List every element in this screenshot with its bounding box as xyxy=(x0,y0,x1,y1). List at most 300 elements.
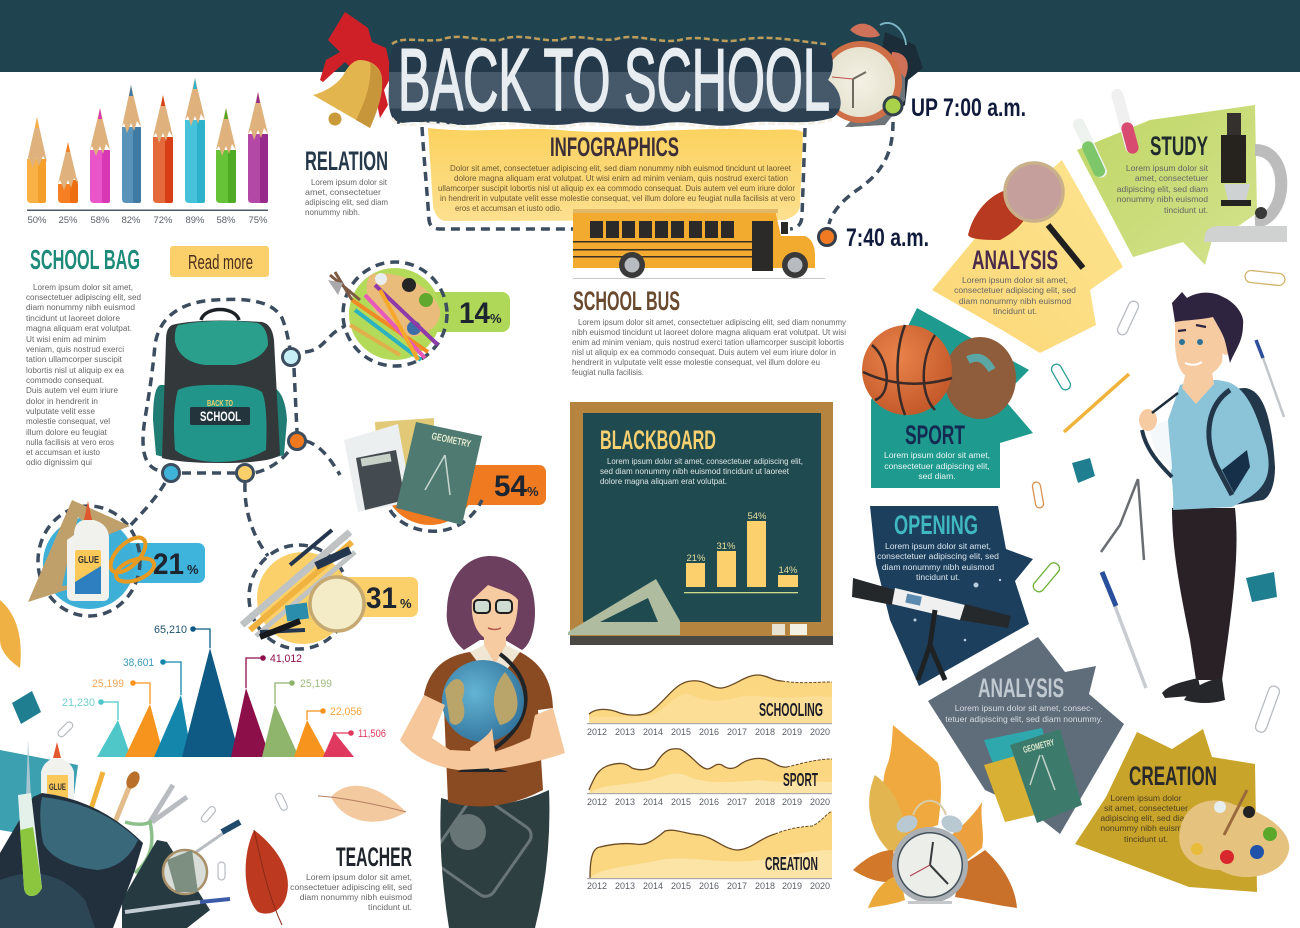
study shape xyxy=(1077,105,1257,265)
clock bells xyxy=(894,812,965,836)
pencil 58% xyxy=(90,108,110,203)
analysis text xyxy=(945,703,1103,724)
sport years: 2015 xyxy=(671,797,691,807)
school bag text xyxy=(26,282,141,467)
creation label: CREATION xyxy=(765,854,818,874)
skirt xyxy=(440,790,549,928)
value labels: 65,210 xyxy=(154,624,187,636)
yellow bottom leaf xyxy=(868,875,905,908)
scissors xyxy=(105,532,157,586)
value labels: 22,056 xyxy=(330,706,362,718)
palette xyxy=(367,273,440,337)
schooling years: 2014 xyxy=(643,727,663,737)
blue pen xyxy=(125,902,200,912)
pencil percent labels: 25% xyxy=(58,215,78,226)
sport text xyxy=(884,450,990,481)
creation years: 2018 xyxy=(755,881,775,891)
eyes xyxy=(1179,339,1203,345)
raised arm xyxy=(1148,420,1172,470)
paint palette xyxy=(1179,790,1289,877)
bag flap xyxy=(175,321,268,365)
share: 31% drawing tools xyxy=(242,530,418,649)
sharpener: left xyxy=(12,691,41,724)
school bag text: magna aliquam erat volutpat. xyxy=(26,323,132,333)
backpack pocket xyxy=(0,873,95,928)
sharpeners xyxy=(1072,458,1277,602)
read more button: Read more xyxy=(188,252,253,274)
plaque top stitching xyxy=(392,37,826,44)
percent value: 14 xyxy=(459,297,490,330)
study text: Lorem ipsum dolor sit xyxy=(1126,163,1209,173)
read more button xyxy=(170,246,269,277)
shoes xyxy=(1162,678,1225,703)
creation years: 2019 xyxy=(782,881,802,891)
teacher text: consectetuer adipiscing elit, sed xyxy=(290,882,412,892)
area chart: creation xyxy=(587,811,832,891)
creation text xyxy=(1100,793,1192,844)
value labels xyxy=(62,624,386,740)
analysis text xyxy=(954,275,1076,316)
creation years: 2015 xyxy=(671,881,691,891)
right leaf xyxy=(945,802,983,870)
sport years: 2012 xyxy=(587,797,607,807)
school bus text: enim ad minim veniam, quis nostrud exerci tation ullamcorper suscipit lobortis xyxy=(572,337,844,347)
analysis heading: ANALYSIS xyxy=(972,245,1058,275)
chalk tray items xyxy=(772,624,785,635)
blackboard text: Lorem ipsum dolor sit amet, consectetuer adipiscing elit, xyxy=(607,456,803,466)
sport text: sed diam. xyxy=(918,471,956,481)
neck xyxy=(484,636,506,664)
lower right leaf xyxy=(955,850,1017,908)
infographics body: dolore magna aliquam erat volutpat. Ut wisi enim ad minim veniam, quis nostrud exerci tation xyxy=(454,173,788,183)
clock stand xyxy=(908,901,952,904)
magnifier xyxy=(310,577,364,631)
value labels: 41,012 xyxy=(270,653,302,665)
timeline node: bus xyxy=(818,228,836,246)
creation years: 2017 xyxy=(727,881,747,891)
blackboard text xyxy=(600,456,803,486)
school bag text: diam nonummy nibh euismod xyxy=(26,302,135,312)
face xyxy=(1175,312,1224,378)
trousers xyxy=(1172,508,1237,680)
teal notebook xyxy=(984,728,1056,795)
schooling years xyxy=(587,727,830,737)
analysis text: Lorem ipsum dolor sit amet, xyxy=(962,275,1068,285)
bar labels: 54% xyxy=(747,511,767,522)
school bag text: consectetuer adipiscing elit, sed xyxy=(26,292,141,302)
teacher figure xyxy=(400,556,565,928)
orange pill xyxy=(455,465,546,505)
neck xyxy=(1182,372,1214,404)
school bag text: commodo consequat. xyxy=(26,375,104,385)
creation text: sit amet, consectetuer xyxy=(1104,803,1188,813)
shirt xyxy=(424,652,553,806)
panel: analysis yellow xyxy=(932,160,1123,353)
pale left leaf xyxy=(869,775,908,852)
share: 21% glue and ruler xyxy=(28,500,205,616)
backpack strap xyxy=(1209,390,1232,495)
school bag text: tation ullamcorper suscipit xyxy=(26,354,123,364)
creation text: adipiscing elit, sed diam xyxy=(1100,813,1192,823)
clock wire xyxy=(880,23,906,45)
leaf: pale xyxy=(318,786,406,822)
backpack flap xyxy=(40,797,138,870)
study text xyxy=(1117,163,1209,215)
test tubes xyxy=(1071,88,1140,180)
school bag text: veniam, quis nostrud exerci xyxy=(26,344,124,354)
bell with red ribbon xyxy=(313,12,392,128)
school bag text: vulputate velit esse xyxy=(26,406,95,416)
timeline label: up: UP 7:00 a.m. xyxy=(911,94,1026,122)
school bag text: lobortis nisl ut aliquip ex ea xyxy=(26,365,124,375)
teacher text: Lorem ipsum dolor sit amet, xyxy=(306,872,412,882)
blackboard xyxy=(568,402,833,645)
ribbon xyxy=(320,12,392,118)
teacher heading: TEACHER xyxy=(336,842,412,872)
hand xyxy=(1139,409,1157,431)
school bag text: odio dignissim qui xyxy=(26,457,92,467)
title plaque xyxy=(389,30,841,129)
blue pill xyxy=(125,543,205,583)
sport years: 2013 xyxy=(615,797,635,807)
school bus text xyxy=(572,317,847,377)
infographics body: eros et accumsan et iusto odio. xyxy=(455,203,562,213)
percent sign: % xyxy=(187,562,199,577)
school bag text: Duis autem vel eum iriure xyxy=(26,385,118,395)
analysis text: consectetuer adipiscing elit, sed xyxy=(954,285,1076,295)
study heading: STUDY xyxy=(1150,131,1208,161)
sport text: Lorem ipsum dolor sit amet, xyxy=(884,450,990,460)
pencil percent labels: 72% xyxy=(153,215,173,226)
share: 54% stationery xyxy=(344,418,546,531)
pencil percent labels: 75% xyxy=(248,215,268,226)
relation text: Lorem ipsum dolor sit xyxy=(311,177,388,187)
creation years: 2013 xyxy=(615,881,635,891)
mountain chart xyxy=(62,624,386,757)
backpack xyxy=(1206,388,1275,505)
creation years: 2016 xyxy=(699,881,719,891)
school bag text: nulla facilisis at vero eros xyxy=(26,437,114,447)
ear xyxy=(1221,339,1231,355)
clock body xyxy=(892,827,968,903)
teacher text: diam nonummy nibh euismod xyxy=(300,892,412,902)
sport years: 2019 xyxy=(782,797,802,807)
connector nodes xyxy=(162,348,306,482)
glue bottle xyxy=(84,501,92,520)
infographics body: Dolor sit amet, consectetuer adipiscing elit, sed diam nonummy nibh euismod tincidunt ut laoreet xyxy=(450,163,792,173)
bar labels: 31% xyxy=(716,541,736,552)
compass xyxy=(1101,479,1144,560)
creation heading: CREATION xyxy=(1129,761,1217,791)
sport label: SPORT xyxy=(783,770,818,790)
school bag text: dolor in hendrerit in xyxy=(26,396,98,406)
sport text: consectetuer adipiscing elit, xyxy=(884,461,990,471)
shirt xyxy=(1167,380,1269,510)
opening text xyxy=(877,541,999,582)
panel: analysis grey xyxy=(928,637,1124,834)
plaque bottom stitching xyxy=(392,118,832,128)
blue pen: upper right xyxy=(1256,340,1284,417)
stars xyxy=(914,579,1001,641)
globe xyxy=(442,660,524,742)
pencil percent labels xyxy=(27,215,268,226)
pencil 82% xyxy=(122,85,141,203)
title text: BACK TO SCHOOL xyxy=(398,30,830,129)
sport years: 2020 xyxy=(810,797,830,807)
teacher text: tincidunt ut. xyxy=(368,902,412,912)
school bag text: et accumsan et iusto xyxy=(26,447,100,457)
percent value: 54 xyxy=(494,470,527,503)
relation heading: RELATION xyxy=(305,146,388,176)
study text: nonummy nibh euismod xyxy=(1117,194,1208,204)
brushes xyxy=(330,272,360,300)
yellow pill xyxy=(340,577,418,617)
board surface xyxy=(583,413,821,622)
school bag text: illum dolore eu feugiat xyxy=(26,427,108,437)
creation shape xyxy=(1075,729,1257,892)
glove xyxy=(944,337,1016,419)
infographics heading: INFOGRAPHICS xyxy=(550,132,679,162)
magnifier handle xyxy=(1048,225,1083,268)
school bag illustration: SCHOOL xyxy=(200,408,241,424)
school bag illustration xyxy=(153,310,287,463)
schooling years: 2013 xyxy=(615,727,635,737)
bell clapper xyxy=(328,112,342,126)
clock handle xyxy=(913,801,946,815)
schooling years: 2016 xyxy=(699,727,719,737)
lower left leaf xyxy=(853,850,898,882)
bar labels: 14% xyxy=(778,565,798,576)
schooling years: 2017 xyxy=(727,727,747,737)
infographics body: ullamcorper suscipit lobortis nisl ut aliquip ex ea commodo consequat. Duis autem vel eum iriure dolor xyxy=(438,183,795,193)
pencil percent labels: 50% xyxy=(27,215,47,226)
opening shape xyxy=(870,506,1033,686)
teacher text xyxy=(290,872,412,912)
school bus text: nibh euismod tincidunt ut laoreet dolore magna aliquam erat volutpat. Ut wisi xyxy=(572,327,846,337)
study text: amet, consectetuer xyxy=(1135,173,1208,183)
school bus text: nisl ut aliquip ex ea commodo consequat. Duis autem vel eum iriure dolor in xyxy=(572,347,836,357)
magnifier xyxy=(163,850,207,894)
bag front pocket xyxy=(174,385,266,462)
face xyxy=(472,585,518,642)
relation text: nonummy nibh. xyxy=(305,207,360,217)
value labels: 25,199 xyxy=(92,678,124,690)
arm strap xyxy=(1142,430,1172,477)
sport years: 2016 xyxy=(699,797,719,807)
blackboard text: sed diam nonummy nibh euismod tincidunt ut laoreet xyxy=(600,466,790,476)
school bag text: molestie consequat, vel xyxy=(26,416,110,426)
grey shape xyxy=(928,637,1124,834)
calculator xyxy=(356,450,405,510)
dark backpack xyxy=(0,793,143,928)
bell body xyxy=(313,60,382,128)
microscope xyxy=(1204,113,1287,242)
yellow note xyxy=(428,128,803,221)
panel: infographics intro xyxy=(422,127,805,229)
creation years: 2020 xyxy=(810,881,830,891)
geometry book xyxy=(1010,729,1082,823)
sport years: 2017 xyxy=(727,797,747,807)
blue pen: lower xyxy=(1102,572,1146,688)
blackboard text: dolore magna aliquam erat volutpat. xyxy=(600,476,727,486)
share: 14% art supplies xyxy=(328,262,510,366)
pencil 89% xyxy=(185,78,205,203)
mouth xyxy=(488,628,501,630)
schooling years: 2020 xyxy=(810,727,830,737)
bar labels: 21% xyxy=(686,553,706,564)
school bus text: Lorem ipsum dolor sit amet, consectetuer adipiscing elit, sed diam nonummy xyxy=(578,317,847,327)
clock ring xyxy=(820,41,902,123)
creation text: tincidunt ut. xyxy=(1124,834,1168,844)
opening text: tincidunt ut. xyxy=(916,572,960,582)
clock shadow xyxy=(850,32,923,127)
dashed timeline path xyxy=(829,122,893,224)
scissors xyxy=(150,785,187,822)
dark books xyxy=(122,840,210,928)
pencil 50% xyxy=(27,117,47,203)
school bus illustration xyxy=(573,209,825,279)
percent sign: % xyxy=(490,311,502,326)
chart axis xyxy=(27,210,268,211)
sport years xyxy=(587,797,830,807)
hair xyxy=(1172,292,1243,363)
pencil 72% xyxy=(153,95,173,203)
bar chart xyxy=(684,511,798,593)
paper clip xyxy=(57,721,74,738)
yellow folder xyxy=(984,754,1035,822)
compass xyxy=(196,830,228,852)
clock hands xyxy=(853,72,866,108)
panel: opening xyxy=(852,506,1033,686)
leaf: red xyxy=(246,830,288,925)
pencil tube xyxy=(26,740,31,800)
percent sign: % xyxy=(527,484,539,499)
mouth xyxy=(1185,362,1202,365)
green pill xyxy=(425,292,510,332)
panel: study xyxy=(1071,88,1287,265)
paper clips: lower left xyxy=(200,792,288,880)
relation text xyxy=(305,177,388,217)
pencil 25% xyxy=(58,142,78,203)
glasses xyxy=(474,600,512,613)
yellow pencil xyxy=(90,772,103,812)
ruler triangle xyxy=(28,500,130,602)
opening text: Lorem ipsum dolor sit amet, xyxy=(885,541,991,551)
analysis text: tetuer adipiscing elit, sed diam nonummy. xyxy=(945,714,1103,724)
relation text: amet, consectetuer xyxy=(305,187,381,197)
pencil percent labels: 89% xyxy=(185,215,205,226)
board frame xyxy=(570,402,833,643)
percent value: 21 xyxy=(153,548,184,581)
pencil bar chart xyxy=(27,78,268,226)
skirt watermark xyxy=(429,792,535,900)
schooling years: 2012 xyxy=(587,727,607,737)
analysis text: Lorem ipsum dolor sit amet, consec- xyxy=(955,703,1093,713)
schooling label: SCHOOLING xyxy=(759,700,823,720)
sport heading: SPORT xyxy=(905,420,965,450)
student figure xyxy=(1139,292,1275,703)
schooling years: 2019 xyxy=(782,727,802,737)
sport years: 2014 xyxy=(643,797,663,807)
mountains xyxy=(97,720,131,757)
study text: tincidunt ut. xyxy=(1164,205,1208,215)
dashed connectors xyxy=(128,299,345,556)
magnifier xyxy=(1005,163,1063,221)
creation years xyxy=(587,881,830,891)
value labels: 21,230 xyxy=(62,697,95,709)
triangle ruler xyxy=(568,579,680,635)
share: 21% glue and ruler: GLUE xyxy=(78,555,99,566)
glue bottle xyxy=(53,742,61,758)
sport years: 2018 xyxy=(755,797,775,807)
telescope xyxy=(852,578,1011,680)
notebook xyxy=(375,418,434,500)
geometry book xyxy=(396,422,482,525)
value labels: 11,506 xyxy=(358,728,386,740)
panel: sport xyxy=(862,308,1033,488)
infographics body xyxy=(438,163,795,213)
school bus text: hendrerit in vulputate velit esse molestie consequat, vel illum dolore eu xyxy=(572,357,820,367)
hair xyxy=(447,556,535,650)
schooling years: 2018 xyxy=(755,727,775,737)
infographics body: in hendrerit in vulputate velit esse molestie consequat, vel illum dolore eu feugiat nulla facilisis at vero xyxy=(440,193,795,203)
schooling years: 2015 xyxy=(671,727,691,737)
opening text: diam nonummy nibh euismod xyxy=(882,562,994,572)
paper clips xyxy=(1031,300,1281,734)
blackboard heading: BLACKBOARD xyxy=(600,425,716,455)
opening heading: OPENING xyxy=(894,510,978,540)
creation years: 2012 xyxy=(587,881,607,891)
paper clip: right top xyxy=(1244,270,1286,286)
value labels: 25,199 xyxy=(300,678,332,690)
school bus text: feugiat nulla facilisis. xyxy=(572,367,644,377)
timeline node: up xyxy=(884,97,902,115)
pencil percent labels: 82% xyxy=(121,215,141,226)
value labels: 38,601 xyxy=(123,657,154,669)
arms xyxy=(400,695,495,770)
creation text: nonummy nibh euismod xyxy=(1100,823,1192,833)
analysis text: diam nonummy nibh euismod xyxy=(959,296,1071,306)
panel: analysis grey: GEOMETRY xyxy=(1022,737,1055,755)
school bag text: tincidunt ut laoreet dolore xyxy=(26,313,120,323)
brows xyxy=(1178,325,1206,331)
bag side pockets xyxy=(153,385,287,460)
timeline label: bus: 7:40 a.m. xyxy=(846,224,929,252)
school bus heading: SCHOOL BUS xyxy=(573,286,680,316)
test tube xyxy=(18,793,42,896)
area chart: sport xyxy=(587,749,832,807)
leader lines xyxy=(101,629,351,733)
leaf: left edge xyxy=(0,600,21,668)
globe stand xyxy=(495,654,526,748)
teal paper xyxy=(0,750,78,840)
pencil percent labels: 58% xyxy=(216,215,236,226)
school bag heading: SCHOOL BAG xyxy=(30,244,140,275)
tall leaf xyxy=(883,725,941,840)
pencil percent labels: 58% xyxy=(90,215,110,226)
school bag text: Lorem ipsum dolor sit amet, xyxy=(33,282,133,292)
creation text: Lorem ipsum dolor xyxy=(1110,793,1182,803)
school bag text: Ut wisi enim ad minim xyxy=(26,334,106,344)
header band xyxy=(0,0,1300,72)
alarm clock in title xyxy=(820,23,923,127)
bus wheels xyxy=(619,252,808,278)
dashed frame xyxy=(422,127,805,229)
analysis shape xyxy=(932,160,1123,353)
basketball xyxy=(862,325,952,415)
supplies bundle xyxy=(0,740,240,928)
pencils bundle xyxy=(242,532,355,636)
